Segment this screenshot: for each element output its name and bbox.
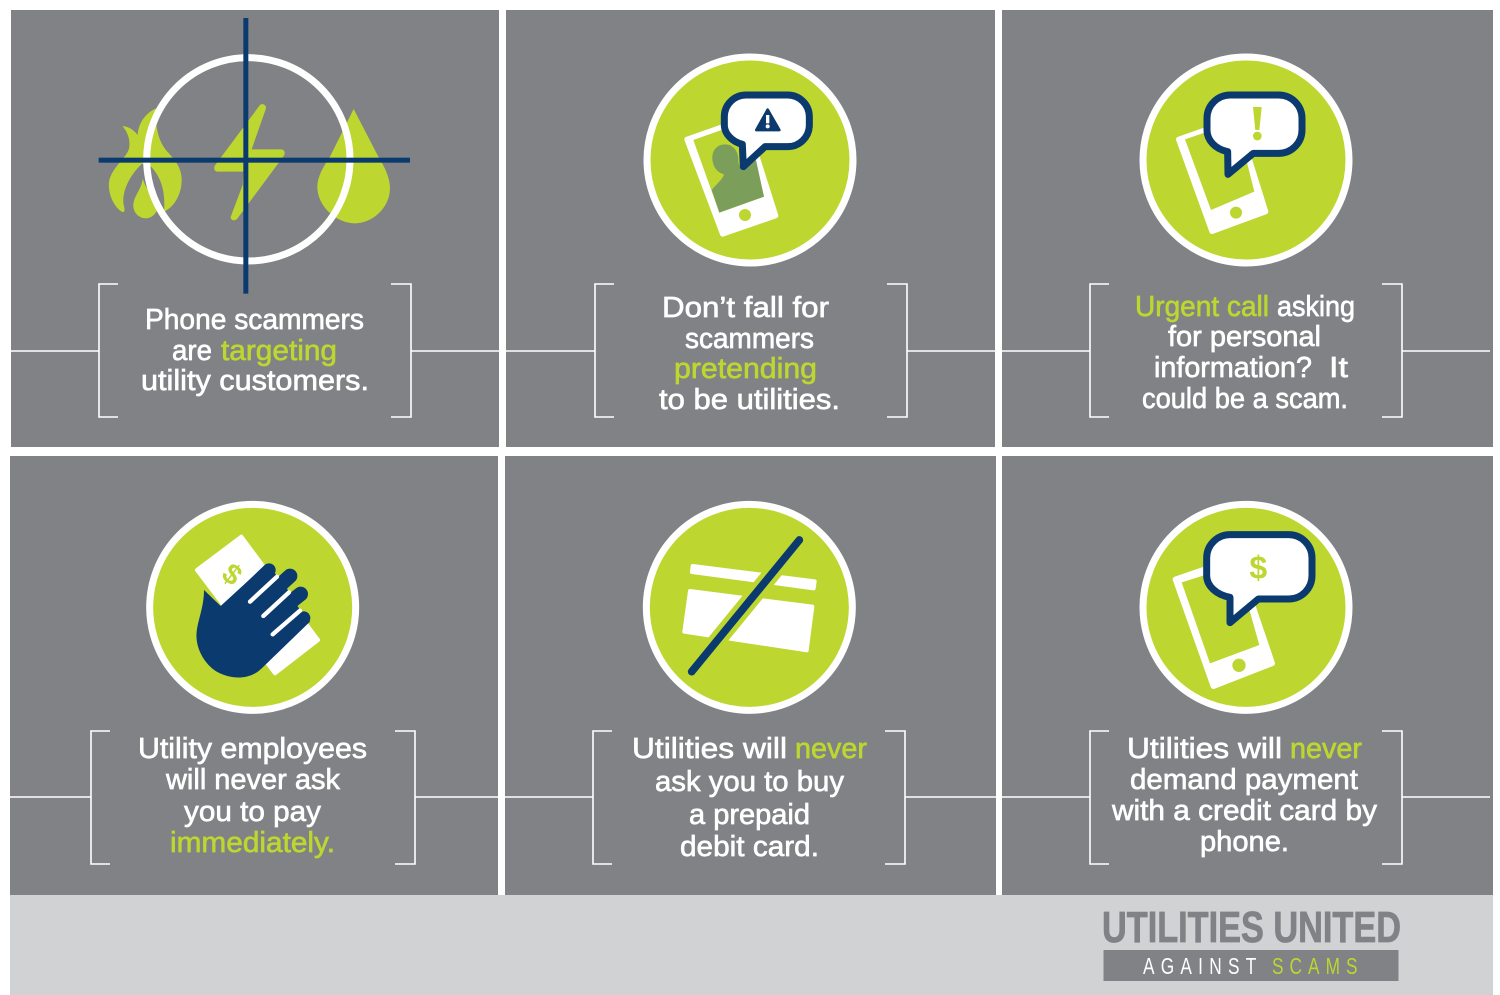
text: urgent call: It xyxy=(1329,352,1348,384)
text: utilities never demand: phone. xyxy=(1200,826,1289,858)
icon: phone with warning bubble xyxy=(647,57,853,263)
text frame xyxy=(11,284,499,417)
text: utilities never buy: never xyxy=(795,733,867,765)
text frame xyxy=(1002,284,1490,417)
panel: credit card by phone xyxy=(1002,456,1493,895)
text: urgent call: Urgent call xyxy=(1135,291,1269,323)
panel: prepaid debit card xyxy=(505,456,996,895)
text frame xyxy=(505,731,996,864)
text: utility employees: Utility employees xyxy=(138,733,367,765)
logo: Utilities United Against Scams: UTILITIES UNITED xyxy=(1102,903,1401,952)
icon: phone with exclamation bubble xyxy=(1143,57,1349,263)
text: don't fall: Don’t fall for xyxy=(662,292,829,324)
text: phone scammers: are xyxy=(172,335,212,367)
text: utilities never buy: ask you to buy xyxy=(655,766,845,798)
panel: urgent call xyxy=(1002,10,1493,447)
text: utilities never buy: debit card. xyxy=(680,831,819,863)
text: don't fall: to be utilities. xyxy=(659,384,840,416)
text: don't fall: scammers xyxy=(685,323,814,355)
text: phone scammers: targeting xyxy=(221,335,337,367)
text: utilities never buy: a prepaid xyxy=(689,799,810,831)
text: phone scammers: utility customers. xyxy=(141,365,369,397)
logo: Utilities United Against Scams: AGAINST xyxy=(1143,955,1256,980)
panel: targeting xyxy=(11,10,499,447)
icon: phone with dollar bubble xyxy=(1143,504,1349,710)
text: phone scammers: Phone scammers xyxy=(145,304,364,336)
icon: hand with cash: $ xyxy=(216,557,248,592)
text: urgent call: could be a scam. xyxy=(1142,383,1348,415)
text: utilities never demand: Utilities will xyxy=(1127,733,1282,765)
text frame xyxy=(10,731,498,864)
text: utility employees: you to pay xyxy=(184,796,321,828)
text: urgent call: for personal xyxy=(1168,321,1321,353)
text: utility employees: will never ask xyxy=(165,764,340,796)
text: utilities never buy: Utilities will xyxy=(632,733,787,765)
icon: hand with cash xyxy=(150,504,356,710)
icon: crossed-out card xyxy=(646,504,852,710)
text: urgent call: information? xyxy=(1154,352,1312,384)
footer band xyxy=(10,895,1493,995)
panel: pay immediately xyxy=(10,456,498,895)
text: don't fall: pretending xyxy=(674,353,817,385)
text: urgent call: asking xyxy=(1277,291,1355,323)
text: utilities never demand: never xyxy=(1290,733,1362,765)
text: utilities never demand: with a credit card by xyxy=(1111,795,1378,827)
icon: crosshair over fire, power and water xyxy=(99,18,410,294)
text frame xyxy=(506,284,995,417)
text: utilities never demand: demand payment xyxy=(1130,764,1358,796)
text frame xyxy=(1002,731,1490,864)
panel: pretending xyxy=(506,10,995,447)
logo: Utilities United Against Scams xyxy=(1102,903,1401,981)
icon: phone with dollar bubble: $ xyxy=(1249,550,1267,586)
text: utility employees: immediately. xyxy=(170,827,335,859)
logo: Utilities United Against Scams: SCAMS xyxy=(1272,955,1358,980)
